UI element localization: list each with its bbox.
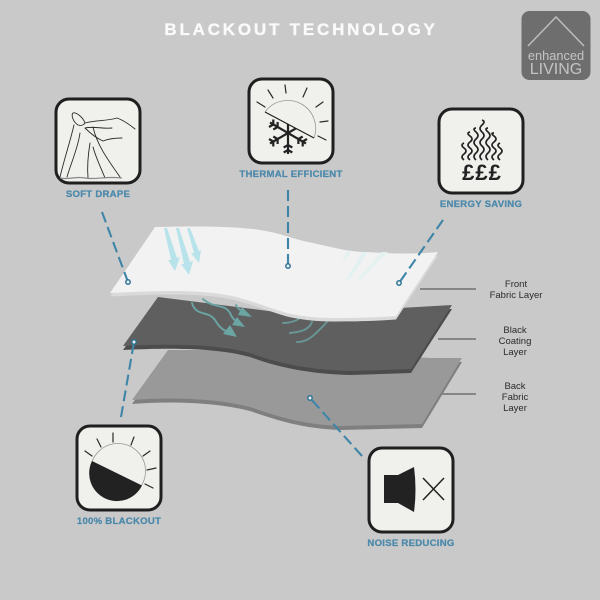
logo: enhanced living: LIVING xyxy=(530,61,582,78)
layer line: front xyxy=(420,288,476,290)
side label: back fabric layer: Fabric xyxy=(502,392,528,403)
side label: black coating layer: Black xyxy=(503,325,527,336)
connector: blackout xyxy=(121,340,136,417)
side label: black coating layer: Coating xyxy=(499,336,531,347)
side label: black coating layer: Layer xyxy=(503,347,527,358)
icon: energy saving: £££ xyxy=(462,160,502,185)
connector: thermal xyxy=(286,190,290,268)
label: noise reducing: NOISE REDUCING xyxy=(367,538,455,549)
side label: front fabric layer: Front xyxy=(505,279,527,290)
icon: 100% blackout xyxy=(77,426,161,510)
title: BLACKOUT TECHNOLOGY xyxy=(164,20,438,39)
black coating layer xyxy=(123,297,452,375)
layer line: back xyxy=(442,393,476,395)
heat waves under front layer xyxy=(192,299,327,342)
label: soft drape: SOFT DRAPE xyxy=(66,189,131,200)
side label: front fabric layer: Fabric Layer xyxy=(490,290,542,301)
back fabric layer xyxy=(132,350,462,430)
label: thermal: THERMAL EFFICIENT xyxy=(239,169,343,180)
icon: soft drape xyxy=(56,99,140,183)
snowflake xyxy=(268,120,308,154)
icon: thermal xyxy=(249,79,333,163)
side label: back fabric layer: Layer xyxy=(503,403,527,414)
arrows on front layer xyxy=(164,228,201,275)
logo: enhanced living: enhanced xyxy=(528,48,584,63)
icon: noise reducing xyxy=(369,448,453,532)
label: 100% blackout: 100% BLACKOUT xyxy=(77,516,161,527)
icon: energy saving xyxy=(439,109,523,193)
side label: back fabric layer: Back xyxy=(504,381,526,392)
logo: enhanced living xyxy=(522,11,590,80)
connector: energy xyxy=(397,220,443,285)
connector: soft drape xyxy=(102,212,130,284)
layer line: coating xyxy=(438,338,476,340)
label: energy saving: ENERGY SAVING xyxy=(440,199,522,210)
connector: noise xyxy=(308,396,362,456)
front fabric layer xyxy=(110,226,438,322)
